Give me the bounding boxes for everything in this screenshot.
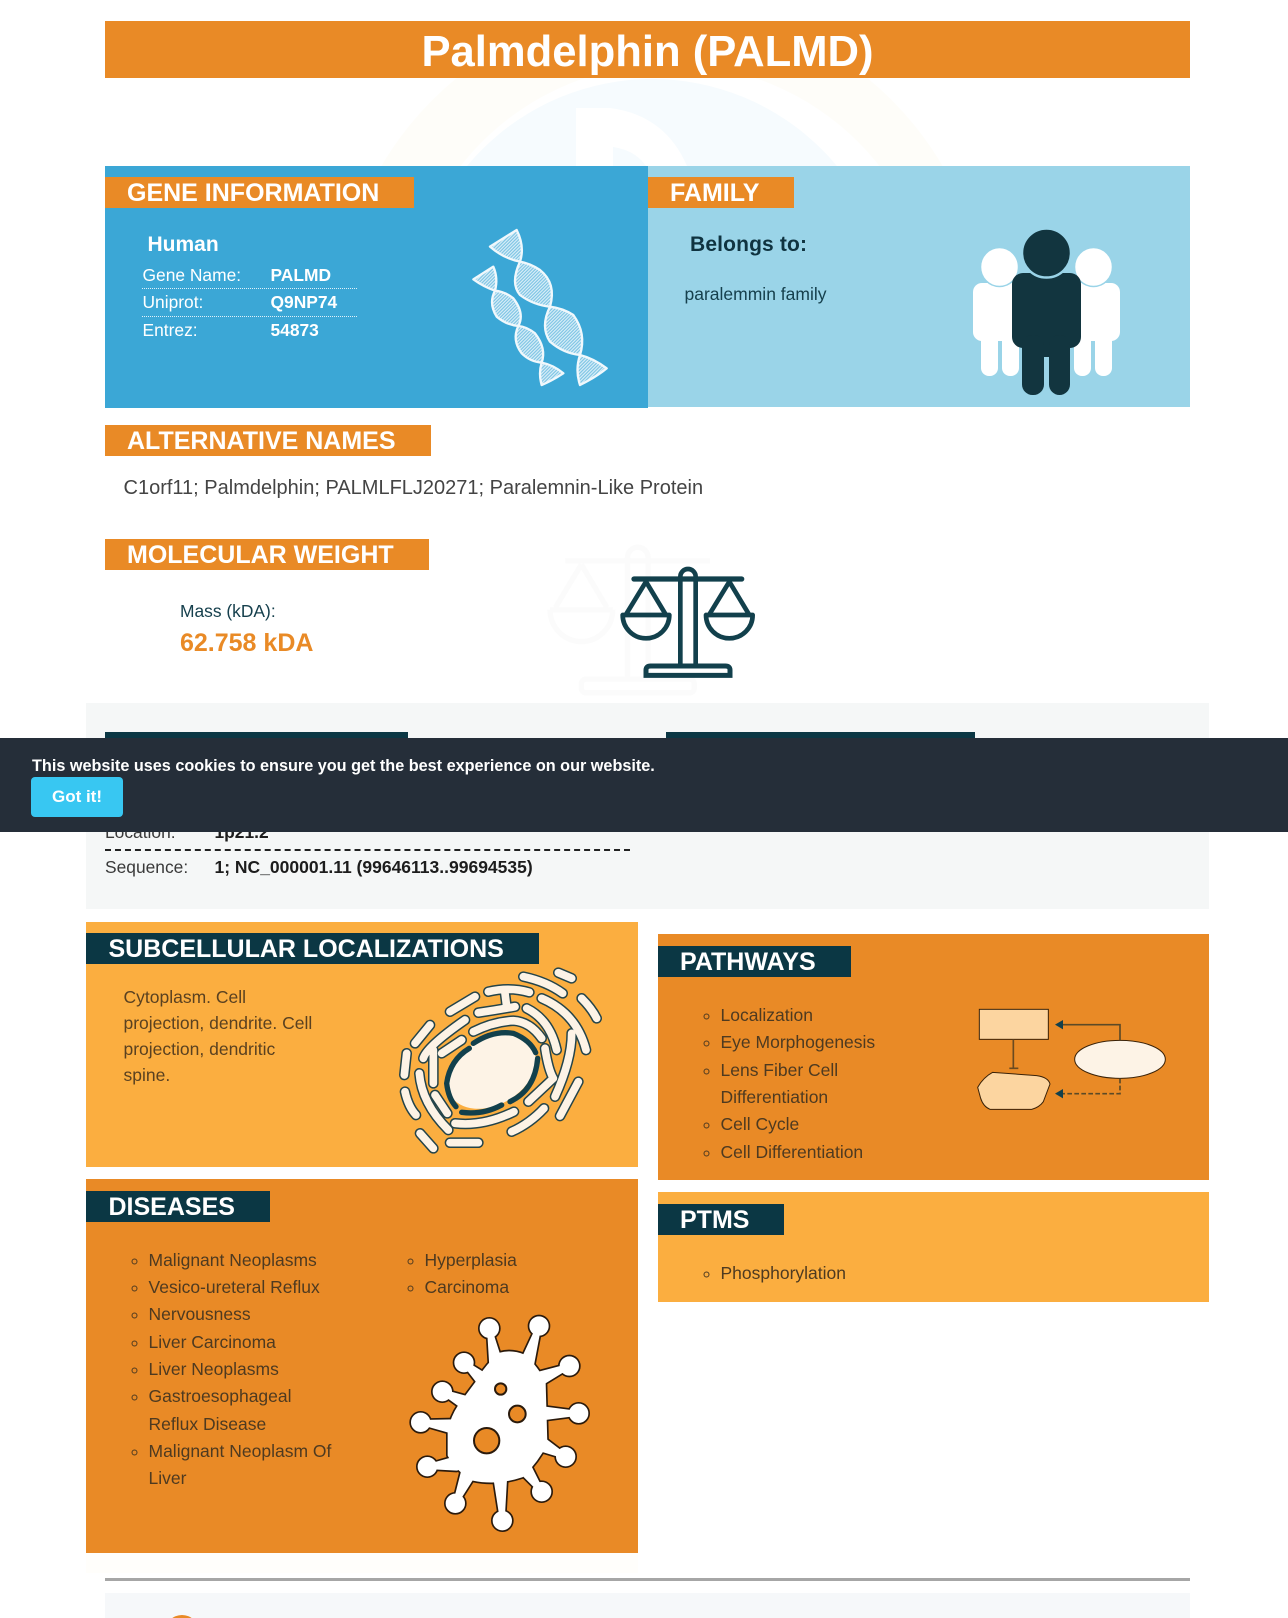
sequence row: 1; NC_000001.11 (99646113..99694535) xyxy=(214,857,533,877)
pathways list: Cell Differentiation xyxy=(720,1142,863,1162)
icon: group of people xyxy=(973,230,1120,395)
pathways list: Lens Fiber Cell Differentiation xyxy=(720,1060,838,1107)
title banner: Palmdelphin (PALMD) xyxy=(421,28,874,76)
footer panel xyxy=(105,1593,1190,1618)
heading: pathways xyxy=(658,946,851,977)
location row: 1p21.2 xyxy=(214,822,269,842)
panel: gene information xyxy=(105,166,648,408)
localization text: projection, dendritic xyxy=(124,1039,275,1059)
panel: family xyxy=(648,166,1190,407)
cookie button xyxy=(31,777,123,817)
panel: subcellular localizations xyxy=(86,922,638,1167)
panel: ptms xyxy=(658,1192,1209,1302)
cookie banner xyxy=(0,738,1288,832)
heading: family: FAMILY xyxy=(670,179,759,207)
disease list column 2: Carcinoma xyxy=(424,1277,509,1297)
pathways list: Cell Cycle xyxy=(720,1114,799,1134)
heading: alternative names: ALTERNATIVE NAMES xyxy=(127,427,396,455)
heading: molecular weight: MOLECULAR WEIGHT xyxy=(127,541,394,569)
heading: family xyxy=(648,177,794,208)
icon: balance scale xyxy=(620,566,755,678)
alternative names text: C1orf11; Palmdelphin; PALMLFLJ20271; Paralemnin-Like Protein xyxy=(124,477,703,499)
panel: molecular weight xyxy=(105,539,755,678)
localization text: projection, dendrite. Cell xyxy=(124,1013,312,1033)
icon: virus xyxy=(409,1314,590,1532)
faint background logo watermark xyxy=(468,79,836,166)
disease list column 2: Hyperplasia xyxy=(424,1250,517,1270)
entrez row: 54873 xyxy=(270,320,319,340)
ptms list: Phosphorylation xyxy=(720,1263,846,1283)
location row xyxy=(105,822,269,842)
heading: gene information: GENE INFORMATION xyxy=(127,179,379,207)
disease list column 1: Vesico-ureteral Reflux xyxy=(148,1277,320,1297)
faint watermark scale xyxy=(533,535,748,705)
cookie message: This website uses cookies to ensure you get the best experience on our website. xyxy=(32,757,655,775)
panel: genomic location xyxy=(86,703,1209,909)
uniprot row xyxy=(142,292,338,312)
icon: pathway diagram xyxy=(977,1008,1166,1110)
heading: diseases: DISEASES xyxy=(108,1193,235,1221)
disease list column 1: Gastroesophageal Reflux Disease xyxy=(148,1386,292,1434)
disease list column 1 xyxy=(132,1250,332,1488)
icon: footer logo top xyxy=(165,1615,199,1618)
gene name row: Gene Name: xyxy=(142,265,241,285)
title banner xyxy=(105,21,1190,78)
heading: diseases xyxy=(86,1191,270,1222)
disease list column 1: Malignant Neoplasm Of Liver xyxy=(148,1441,331,1488)
uniprot row: Q9NP74 xyxy=(270,292,337,312)
disease list column 1: Liver Neoplasms xyxy=(148,1359,279,1379)
disease list column 2 xyxy=(408,1250,517,1297)
panel: alternative names xyxy=(105,425,703,499)
disease list column 1: Malignant Neoplasms xyxy=(148,1250,317,1270)
entrez row xyxy=(142,320,319,340)
icon: cell organelle xyxy=(399,967,602,1154)
heading bar: left xyxy=(105,732,408,763)
disease list column 1: Liver Carcinoma xyxy=(148,1332,276,1352)
belongs to label: Belongs to: xyxy=(690,233,807,256)
heading: subcellular localizations: SUBCELLULAR LOCALIZATIONS xyxy=(108,935,504,963)
species label: Human xyxy=(148,233,219,256)
sequence row: Sequence: xyxy=(105,857,188,877)
panel: diseases xyxy=(86,1179,638,1553)
family name: paralemmin family xyxy=(684,284,826,304)
gene name row: PALMD xyxy=(270,265,331,285)
heading: ptms xyxy=(658,1204,784,1235)
uniprot row: Uniprot: xyxy=(142,292,203,312)
localization text: spine. xyxy=(124,1065,170,1085)
panel: pathways xyxy=(658,934,1209,1180)
mass value: 62.758 kDA xyxy=(180,629,313,657)
icon: dna helix xyxy=(472,228,608,386)
mass label: Mass (kDA): xyxy=(180,601,276,621)
heading: pathways: PATHWAYS xyxy=(680,948,816,976)
pathways list: Eye Morphogenesis xyxy=(720,1032,875,1052)
pathways list xyxy=(704,1005,875,1162)
heading: ptms: PTMS xyxy=(680,1206,749,1234)
pathways list: Localization xyxy=(720,1005,813,1025)
cookie button: Got it! xyxy=(52,787,102,806)
location row: Location: xyxy=(105,822,176,842)
localization text: Cytoplasm. Cell xyxy=(124,987,246,1007)
disease list column 1: Nervousness xyxy=(148,1304,251,1324)
heading bar: right xyxy=(666,732,975,763)
gene name row xyxy=(142,265,331,285)
localization text xyxy=(124,987,312,1085)
entrez row: Entrez: xyxy=(142,320,198,340)
